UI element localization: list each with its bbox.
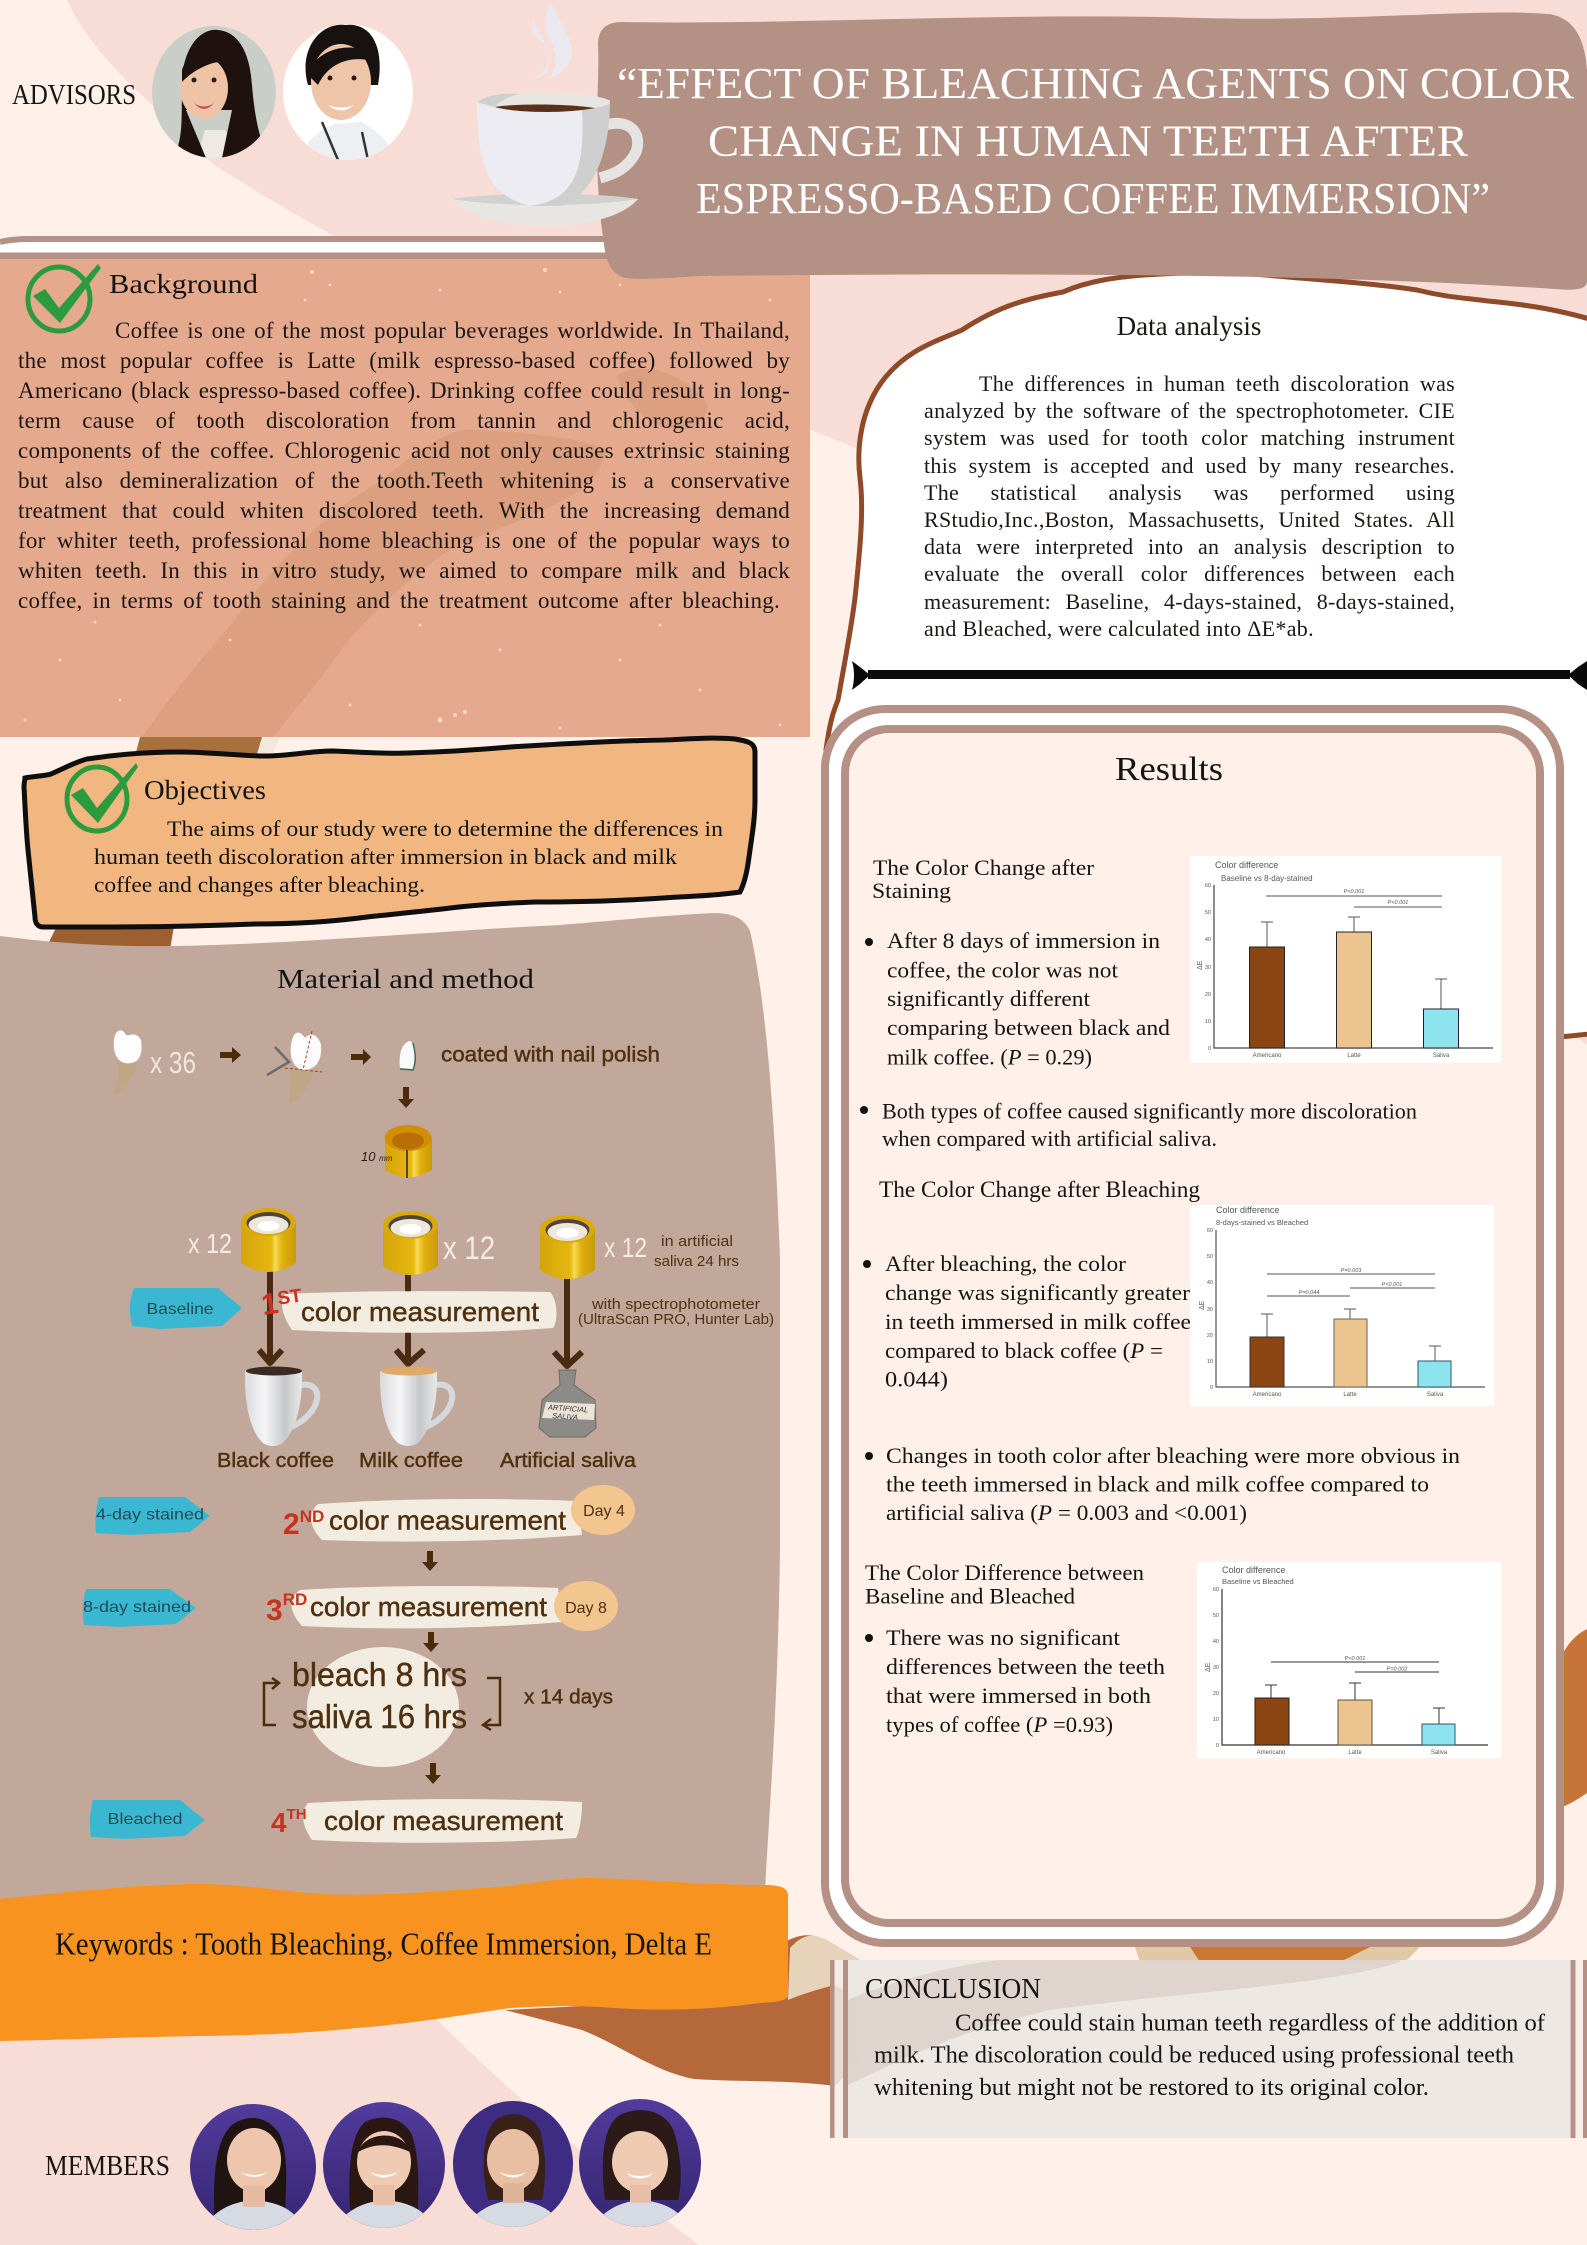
icon: whole tooth x 36 [114,1030,196,1096]
heading: objectives: Objectives [144,775,266,805]
icon: artificial saliva bottle: SALIVA [552,1411,578,1422]
text: staining bullet: comparing between black and [887,1015,1170,1040]
text: changes bullet [865,1443,1460,1525]
text: background body: components of the coffee. Chlorogenic acid not only causes extrinsic staining [18,438,790,463]
text: keywords: Keywords : Tooth Bleaching, Coffee Immersion, Delta E [55,1926,712,1962]
chart: baseline vs 8-day-stained: Color difference [1215,860,1278,870]
text: bleaching bullet: 0.044) [885,1366,948,1392]
chart: 8-days-stained vs bleached: 20 [1207,1333,1213,1339]
arrow [422,1551,438,1571]
chart: baseline vs bleached: Americano [1257,1750,1286,1756]
icon: artificial saliva bottle: ARTIFICIAL [547,1403,589,1414]
text: no significant difference bullet: that were immersed in both [886,1683,1151,1708]
text: data analysis body: and Bleached, were calculated into ΔE*ab. [924,616,1314,641]
step: second color measurement: 2 [283,1508,300,1541]
text: data analysis body: this system is accepted and used by many researches. [924,453,1455,478]
step: fourth color measurement: 4 [271,1807,287,1838]
arrow [398,1087,414,1108]
text: background body: but also demineralization of the tooth.Teeth whitening is a conservative [18,468,790,493]
step: third color measurement: 3 [266,1594,283,1627]
chart: baseline vs bleached: 10 [1213,1717,1219,1723]
arrow [220,1047,241,1063]
chart: baseline vs 8-day-stained: Baseline vs 8-day-stained [1221,874,1313,883]
tag: baseline: Baseline [146,1301,214,1318]
subheading: the color difference between baseline and bleached: The Color Difference between [865,1560,1144,1585]
text: background body: treatment that could whiten discolored teeth. With the increasing demand [18,498,790,523]
text: staining bullet [865,928,1170,1070]
chart: baseline vs bleached: Baseline vs Bleached [1222,1577,1294,1586]
chart: 8-days-stained vs bleached: Color difference [1216,1205,1279,1215]
step: third color measurement: RD [283,1590,307,1609]
photo: advisor 2 [280,20,415,165]
photo: member 1 [190,2104,316,2230]
tag: 4-day stained [95,1497,210,1535]
icon: mounted tooth cylinder 3 [540,1215,595,1279]
step: second color measurement: ND [300,1507,324,1526]
chart: 8-days-stained vs bleached: 60 [1207,1228,1213,1234]
text: data analysis body: system was used for tooth color matching instrument [924,425,1455,450]
chart: baseline vs 8-day-stained: P<0.001 [1388,900,1408,906]
tag: baseline [130,1288,242,1329]
arrow [425,1763,441,1784]
text: objectives: human teeth discoloration after immersion in black and milk [94,844,677,869]
text: both types bullet [860,1098,1417,1151]
icon: tooth being cut [267,1031,322,1105]
text: bleaching bullet: compared to black coffee (P = [885,1338,1163,1363]
subheading: the color change after staining: Staining [872,878,951,903]
chart: baseline vs bleached: 0 [1216,1743,1219,1749]
text: conclusion: Coffee could stain human teeth regardless of the addition of [955,2010,1545,2036]
panel: background frame [0,238,760,300]
chart: baseline vs bleached: P<0.001 [1345,1656,1365,1662]
coffee stain: lower centre [505,1935,1420,2086]
chart: 8-days-stained vs bleached: 40 [1207,1280,1213,1286]
text: data analysis body: The differences in human teeth discoloration was [979,371,1455,396]
chart: baseline vs 8-day-stained: 20 [1205,992,1211,998]
panel: conclusion [830,1960,1587,2138]
chart: 8-days-stained vs bleached: 10 [1207,1359,1213,1365]
flow lines to cups [259,1268,582,1366]
icon: 10 mm ring: 10 mm [361,1149,393,1164]
chart: baseline vs 8-day-stained: Saliva [1433,1053,1450,1059]
chart: baseline vs bleached: P=0.002 [1387,1666,1407,1672]
chart: baseline vs bleached: 40 [1213,1639,1219,1645]
tag: 8-day stained: 8-day stained [83,1599,191,1616]
text: conclusion [874,2010,1545,2101]
coffee stain: right edge [1560,1629,1587,1808]
text: staining bullet: significantly different [887,986,1091,1011]
title banner [597,12,1587,290]
text: no significant difference bullet: differences between the teeth [886,1654,1165,1679]
text: coated with nail polish: coated with nail polish [441,1044,660,1066]
label: x 12 group 1: x 12 [188,1228,232,1259]
chart: 8-days-stained vs bleached: Saliva [1427,1392,1444,1398]
label: x 12 group 2: x 12 [443,1230,495,1266]
badge: day 8: Day 8 [565,1600,607,1617]
text: with spectrophotometer: (UltraScan PRO, Hunter Lab) [578,1311,774,1328]
icon: objectives check mark [67,763,138,831]
badge: day 8 [554,1581,618,1631]
text: bleaching bullet: After bleaching, the color [885,1251,1127,1276]
text: in artificial saliva 24 hrs: in artificial [661,1234,733,1250]
text: background body: coffee, in terms of tooth staining and the treatment outcome after bleaching. [18,588,780,613]
subheading: the color difference between baseline and bleached [865,1560,1144,1608]
chart: 8-days-stained vs bleached: 8-days-stained vs Bleached [1216,1218,1308,1227]
title text [617,59,1575,223]
photo: member 3 [453,2101,573,2227]
tag: 4-day stained: 4-day stained [96,1506,204,1524]
tag: 8-day stained [83,1589,196,1627]
chart: baseline vs bleached: 30 [1213,1665,1219,1671]
text: objectives: coffee and changes after bleaching. [94,872,425,897]
text: data analysis body: RStudio,Inc.,Boston, Massachusetts, United States. All [924,507,1455,532]
chart: baseline vs bleached: Latte [1348,1750,1362,1756]
step: fourth color measurement [271,1799,582,1843]
chart: baseline vs 8-day-stained: Latte [1347,1053,1361,1059]
label: milk coffee: Milk coffee [359,1449,463,1472]
text: no significant difference bullet: There was no significant [886,1625,1121,1650]
panel: results frame [825,709,1560,1943]
photo: advisor 1 [150,24,280,160]
text: background body: Coffee is one of the most popular beverages worldwide. In Thailand, [115,318,790,343]
chart: 8-days-stained vs bleached: Latte [1343,1392,1357,1398]
subheading: the color difference between baseline and bleached: Baseline and Bleached [865,1584,1075,1608]
text: staining bullet: After 8 days of immersion in [887,928,1160,953]
icon: mounted tooth cylinder 2 [383,1211,438,1275]
text: objectives [94,816,723,897]
title text: ESPRESSO-BASED COFFEE IMMERSION” [696,174,1490,223]
heading: data analysis: Data analysis [1117,311,1261,341]
chart: baseline vs 8-day-stained: 30 [1205,965,1211,971]
text: changes bullet: artificial saliva (P = 0.003 and <0.001) [886,1500,1247,1525]
step: second color measurement [283,1499,582,1542]
text: background body: Americano (black espresso-based coffee). Drinking coffee could result in long- [18,378,790,403]
text: data analysis body: evaluate the overall color differences between each [924,561,1455,586]
chart: baseline vs bleached: Color difference [1222,1565,1285,1575]
coffee stain inside background panel [142,369,708,737]
speckles on background panel [24,268,782,730]
chart: 8-days-stained vs bleached: 30 [1207,1307,1213,1313]
badge: day 4 [571,1485,635,1535]
chart: 8-days-stained vs bleached: P<0.001 [1382,1282,1402,1288]
chart: baseline vs 8-day-stained: ΔE [1197,960,1204,970]
step: bleach and saliva cycle [264,1647,500,1767]
text: x 14 days: x 14 days [524,1686,613,1708]
heading: conclusion: CONCLUSION [865,1973,1041,2005]
chart: baseline vs bleached: ΔE [1205,1662,1212,1672]
text: no significant difference bullet: types of coffee (P =0.93) [886,1712,1113,1737]
chart: baseline vs bleached: 50 [1213,1613,1219,1619]
step: bleach and saliva cycle: bleach 8 hrs [292,1656,467,1693]
chart: baseline vs 8-day-stained: 60 [1205,883,1211,889]
arrow [423,1632,439,1652]
heading: material and method: Material and method [277,964,535,994]
step: first color measurement [259,1283,556,1333]
chart: baseline vs 8-day-stained: 10 [1205,1019,1211,1025]
text: bleaching bullet [863,1251,1191,1392]
text: staining bullet: milk coffee. (P = 0.29) [887,1044,1092,1070]
icon: background check mark [28,264,101,331]
label: x 12 group 3: x 12 [604,1232,647,1263]
subheading: the color change after staining: The Color Change after [873,855,1095,880]
background shape: top pink arc [67,0,1587,1045]
subheading: the color change after staining [872,855,1095,903]
step: third color measurement: color measurement [310,1592,547,1622]
step: first color measurement: 1 [259,1287,280,1322]
icon: coffee cup [451,0,638,226]
step: bleach and saliva cycle: saliva 16 hrs [292,1698,467,1735]
chart: baseline vs 8-day-stained: 0 [1208,1046,1211,1052]
icon: artificial saliva bottle [539,1370,596,1437]
panel: material and method [0,913,780,1900]
chart: 8-days-stained vs bleached [1190,1205,1494,1406]
text: objectives: The aims of our study were to determine the differences in [167,816,723,841]
label: members: MEMBERS [45,2150,170,2182]
text: with spectrophotometer: with spectrophotometer [591,1296,760,1313]
text: background body: whiten teeth. In this in vitro study, we aimed to compare milk and black [18,558,790,583]
chart: baseline vs bleached: Saliva [1431,1750,1448,1756]
text: data analysis body: The statistical analysis was performed using [924,480,1455,505]
text: staining bullet: coffee, the color was not [887,958,1119,982]
step: second color measurement: color measurement [329,1506,566,1536]
icon: tooth crown coated [400,1041,415,1070]
chart: 8-days-stained vs bleached: P=0.003 [1341,1268,1362,1274]
chart: 8-days-stained vs bleached: P=0.044 [1299,1290,1319,1296]
step: fourth color measurement: TH [287,1806,307,1823]
text: data analysis body: measurement: Baseline, 4-days-stained, 8-days-stained, [924,589,1455,614]
step: first color measurement: ST [276,1285,304,1310]
chart: 8-days-stained vs bleached: 0 [1210,1385,1213,1391]
icon: 10 mm ring [361,1125,432,1178]
text: both types bullet: Both types of coffee caused significantly more discoloration [882,1098,1417,1124]
chart: 8-days-stained vs bleached: 50 [1207,1254,1213,1260]
tag: bleached: Bleached [108,1811,182,1828]
text: changes bullet: Changes in tooth color after bleaching were more obvious in [886,1443,1460,1468]
label: advisors: ADVISORS [12,80,136,111]
text: data analysis body: analyzed by the software of the spectrophotometer. CIE [924,398,1455,423]
coffee stain behind objectives [45,737,280,950]
text: background body [18,318,790,613]
text: bleaching bullet: change was significantly greater [885,1280,1191,1305]
chart: 8-days-stained vs bleached: ΔE [1199,1300,1206,1310]
chart: baseline vs 8-day-stained [1190,856,1501,1063]
chart: baseline vs bleached: 60 [1213,1587,1219,1593]
text: both types bullet: when compared with artificial saliva. [882,1126,1217,1151]
icon: black coffee mug [245,1366,317,1446]
step: third color measurement [266,1586,562,1628]
photo: member 2 [323,2102,445,2228]
chart: baseline vs 8-day-stained: 40 [1205,937,1211,943]
step: fourth color measurement: color measurement [324,1806,564,1836]
text: background body: the most popular coffee is Latte (milk espresso-based coffee) followed by [18,348,790,373]
badge: day 4: Day 4 [583,1503,625,1520]
text: conclusion: whitening but might not be restored to its original color. [874,2075,1429,2101]
poster artwork: . [924,708,926,719]
text: in artificial saliva 24 hrs [654,1234,739,1270]
separator bar [852,661,1587,690]
icon: milk coffee mug [380,1366,452,1446]
background shape: bottom pink arc [0,1708,699,2245]
chart: baseline vs 8-day-stained: 50 [1205,910,1211,916]
text: changes bullet: the teeth immersed in black and milk coffee compared to [886,1472,1429,1496]
panel: objectives [24,738,755,927]
label: artificial saliva: Artificial saliva [500,1449,637,1472]
icon: mounted tooth cylinder 1 [241,1208,296,1272]
text: data analysis body [924,371,1455,641]
title text: “EFFECT OF BLEACHING AGENTS ON COLOR [617,59,1575,108]
photo: member 4 [579,2099,701,2227]
text: with spectrophotometer [578,1296,774,1328]
step: first color measurement: color measurement [301,1297,539,1327]
text: no significant difference bullet [865,1625,1165,1737]
text: data analysis body: data were interpreted into an analysis description to [924,534,1455,559]
title text: CHANGE IN HUMAN TEETH AFTER [708,116,1469,166]
heading: background: Background [109,269,259,299]
subheading: the color change after bleaching: The Color Change after Bleaching [879,1177,1201,1202]
chart: baseline vs bleached [1197,1562,1501,1758]
heading: results: Results [1115,751,1223,788]
chart: baseline vs bleached: 20 [1213,1691,1219,1697]
text: background body: for whiter teeth, professional home bleaching is one of the popular ways to [18,528,790,553]
text: in artificial saliva 24 hrs: saliva 24 hrs [654,1254,739,1270]
icon: whole tooth x 36: x 36 [150,1045,196,1080]
panel: data analysis blob [826,273,1587,1037]
text: bleaching bullet: in teeth immersed in milk coffee [885,1309,1191,1334]
tag: bleached [90,1800,205,1839]
arrow [351,1049,371,1065]
chart: 8-days-stained vs bleached: Americano [1253,1392,1282,1398]
chart: baseline vs 8-day-stained: Americano [1253,1053,1282,1059]
text: conclusion: milk. The discoloration could be reduced using professional teeth [874,2042,1514,2068]
chart: baseline vs 8-day-stained: P<0.001 [1344,889,1364,895]
panel: background [0,259,810,737]
text: background body: term cause of tooth discoloration from tannin and chlorogenic acid, [18,408,790,433]
banner: keywords [0,1878,788,2041]
label: black coffee: Black coffee [217,1449,334,1472]
